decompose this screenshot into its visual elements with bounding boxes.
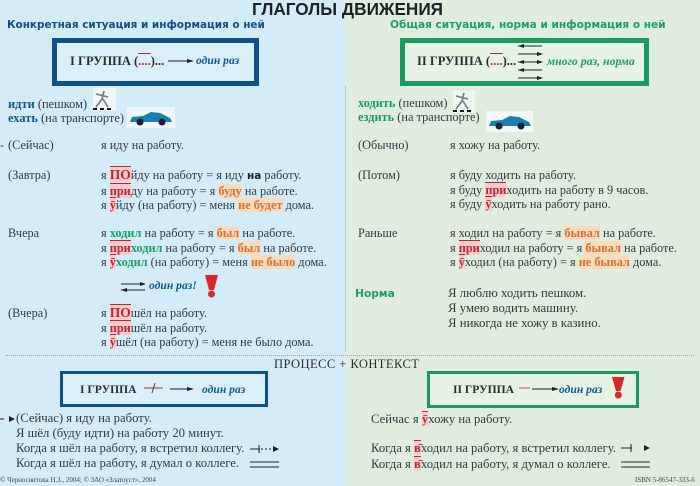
bottom right examples: when: Когда я в̄ходил на работу, я думал о коллеге. (371, 456, 611, 470)
left row: now: (Сейчас) (8, 138, 54, 152)
icon: exclamation mark (612, 377, 624, 398)
icon: walker right (453, 90, 475, 113)
bottom right examples: when: Когда я в̄ходил на работу, я встретил коллегу. (371, 441, 616, 455)
right row: later label: (Потом) (358, 168, 400, 182)
right row: norm label: Норма (355, 287, 395, 300)
examples: Я шёл (буду идти) на работу 20 минут. (16, 426, 224, 440)
left row: tomorrow examples: я приду на работу = я буду на работе. (101, 184, 298, 198)
meaning: один раз (202, 383, 245, 396)
left row: now (0, 138, 184, 152)
parallel lines (621, 462, 650, 468)
heading: left column: Конкретная ситуация и информация о ней (7, 19, 265, 31)
left row: yesterday examples: я ӯходил (на работу) = меня не было дома. (101, 255, 327, 269)
right row: earlier examples (450, 226, 677, 269)
line and arrow (519, 387, 559, 391)
callout: one time (121, 279, 197, 292)
arrow (168, 59, 194, 63)
right row: later examples: я буду ӯходить на работу рано. (450, 197, 611, 211)
panel: bottom group I box (60, 371, 268, 407)
text: ездить (на транспорте) (358, 110, 480, 124)
group I meaning: один раз (196, 54, 239, 67)
icon: walker left (93, 88, 116, 111)
right row: later examples: я буду ходить на работу. (450, 168, 576, 182)
text: ехать (на транспорте) (8, 111, 124, 125)
heading: right column: Общая ситуация, норма и информация о ней (390, 19, 666, 31)
right row: later examples: я буду приходить на работу в 9 часов. (450, 182, 648, 196)
right row: norm examples: Я люблю ходить пешком. (448, 286, 586, 300)
pointer arrow (0, 416, 15, 422)
right row: earlier examples: я ӯходил (на работу) = я не бывал дома. (450, 255, 661, 269)
parallel lines (250, 462, 279, 468)
examples (16, 411, 244, 470)
right row: usually (358, 138, 540, 152)
right row: later examples (450, 168, 648, 211)
examples: Когда я шёл на работу, я встретил коллегу. (16, 441, 244, 455)
one time text: один раз! (149, 279, 197, 292)
subtitle: process + context: ПРОЦЕСС + КОНТЕКСТ (274, 357, 419, 371)
meaning: один раз (559, 383, 602, 396)
left row: yesterday examples (101, 226, 327, 269)
left row: yesterday examples: я приходил на работу = я был на работе. (101, 240, 316, 254)
right row: norm examples: Я никогда не хожу в казино. (448, 316, 601, 330)
ISBN: ISBN 5-86547-333-6 (635, 476, 695, 484)
left row: yesterday perfective label: (Вчера) (8, 306, 47, 320)
label: II ГРУППА (453, 383, 514, 396)
right row: usually: (Обычно) (358, 138, 409, 152)
right verbs block: ходить (пешком) (358, 96, 447, 110)
panel: bottom group II box (427, 371, 639, 408)
copyright: © Черносвитова Н.З., 2004; © ЗАО «Златоуст», 2004 (0, 476, 156, 484)
panel: group II rule box (400, 38, 649, 86)
interrupted arrow (250, 445, 279, 453)
panel: group I rule box (52, 38, 259, 86)
left row: yesterday perfective examples (101, 304, 314, 349)
left row: now: - (0, 138, 4, 152)
group II label: II ГРУППА (....)... (417, 54, 516, 68)
icon: car left (127, 107, 175, 128)
left row: yesterday perfective examples: я ӯшёл (на работу) = меня не было дома. (101, 335, 314, 349)
left row: yesterday perfective examples: я пришёл на работу. (101, 320, 207, 334)
right row: earlier examples: я приходил на работу = я бывал на работе. (450, 240, 677, 254)
left row: tomorrow examples (101, 166, 314, 212)
examples: (Сейчас) я иду на работу. (16, 411, 152, 425)
arrows (121, 282, 146, 292)
interrupted arrow (621, 444, 650, 452)
panel: right green background (345, 0, 700, 486)
group I label: I ГРУППА (....)... (70, 54, 164, 68)
left row: tomorrow examples: я ПОйду на работу = я иду на работу. (101, 167, 302, 182)
left row: tomorrow examples: я ӯйду (на работу) = меня не будет дома. (101, 198, 314, 212)
right row: norm examples: Я умею водить машину. (448, 301, 578, 315)
bottom right examples: when (371, 440, 616, 471)
left row: yesterday perfective examples: я ПОшёл на работу. (101, 305, 207, 320)
left row: tomorrow label: (Завтра) (8, 168, 50, 182)
right row: earlier label: Раньше (358, 226, 397, 240)
right row: usually: я хожу на работу. (450, 138, 540, 152)
arrow (170, 387, 194, 391)
left row: now: я иду на работу. (101, 138, 184, 152)
icon: car right (486, 111, 533, 132)
crossed line (144, 382, 163, 394)
label: I ГРУППА (80, 383, 136, 396)
left row: yesterday examples: я ходил на работу = я был на работе. (101, 226, 295, 240)
arrows back and forth (518, 44, 543, 80)
vertical dotted divider (345, 86, 346, 352)
right row: earlier examples: я ходил на работу = я бывал на работе. (450, 226, 656, 240)
left verbs block: идти (пешком) (8, 97, 87, 111)
right row: norm examples (448, 286, 601, 330)
icon: exclamation mark (205, 275, 218, 298)
bottom right example: now: Сейчас я ӯхожу на работу. (371, 412, 512, 426)
horizontal dotted divider (6, 355, 694, 356)
left row: yesterday label: Вчера (8, 226, 39, 240)
bottom left examples (0, 411, 279, 470)
examples: Когда я шёл на работу, я думал о коллеге. (16, 456, 239, 470)
group II meaning: много раз, норма (547, 54, 635, 68)
